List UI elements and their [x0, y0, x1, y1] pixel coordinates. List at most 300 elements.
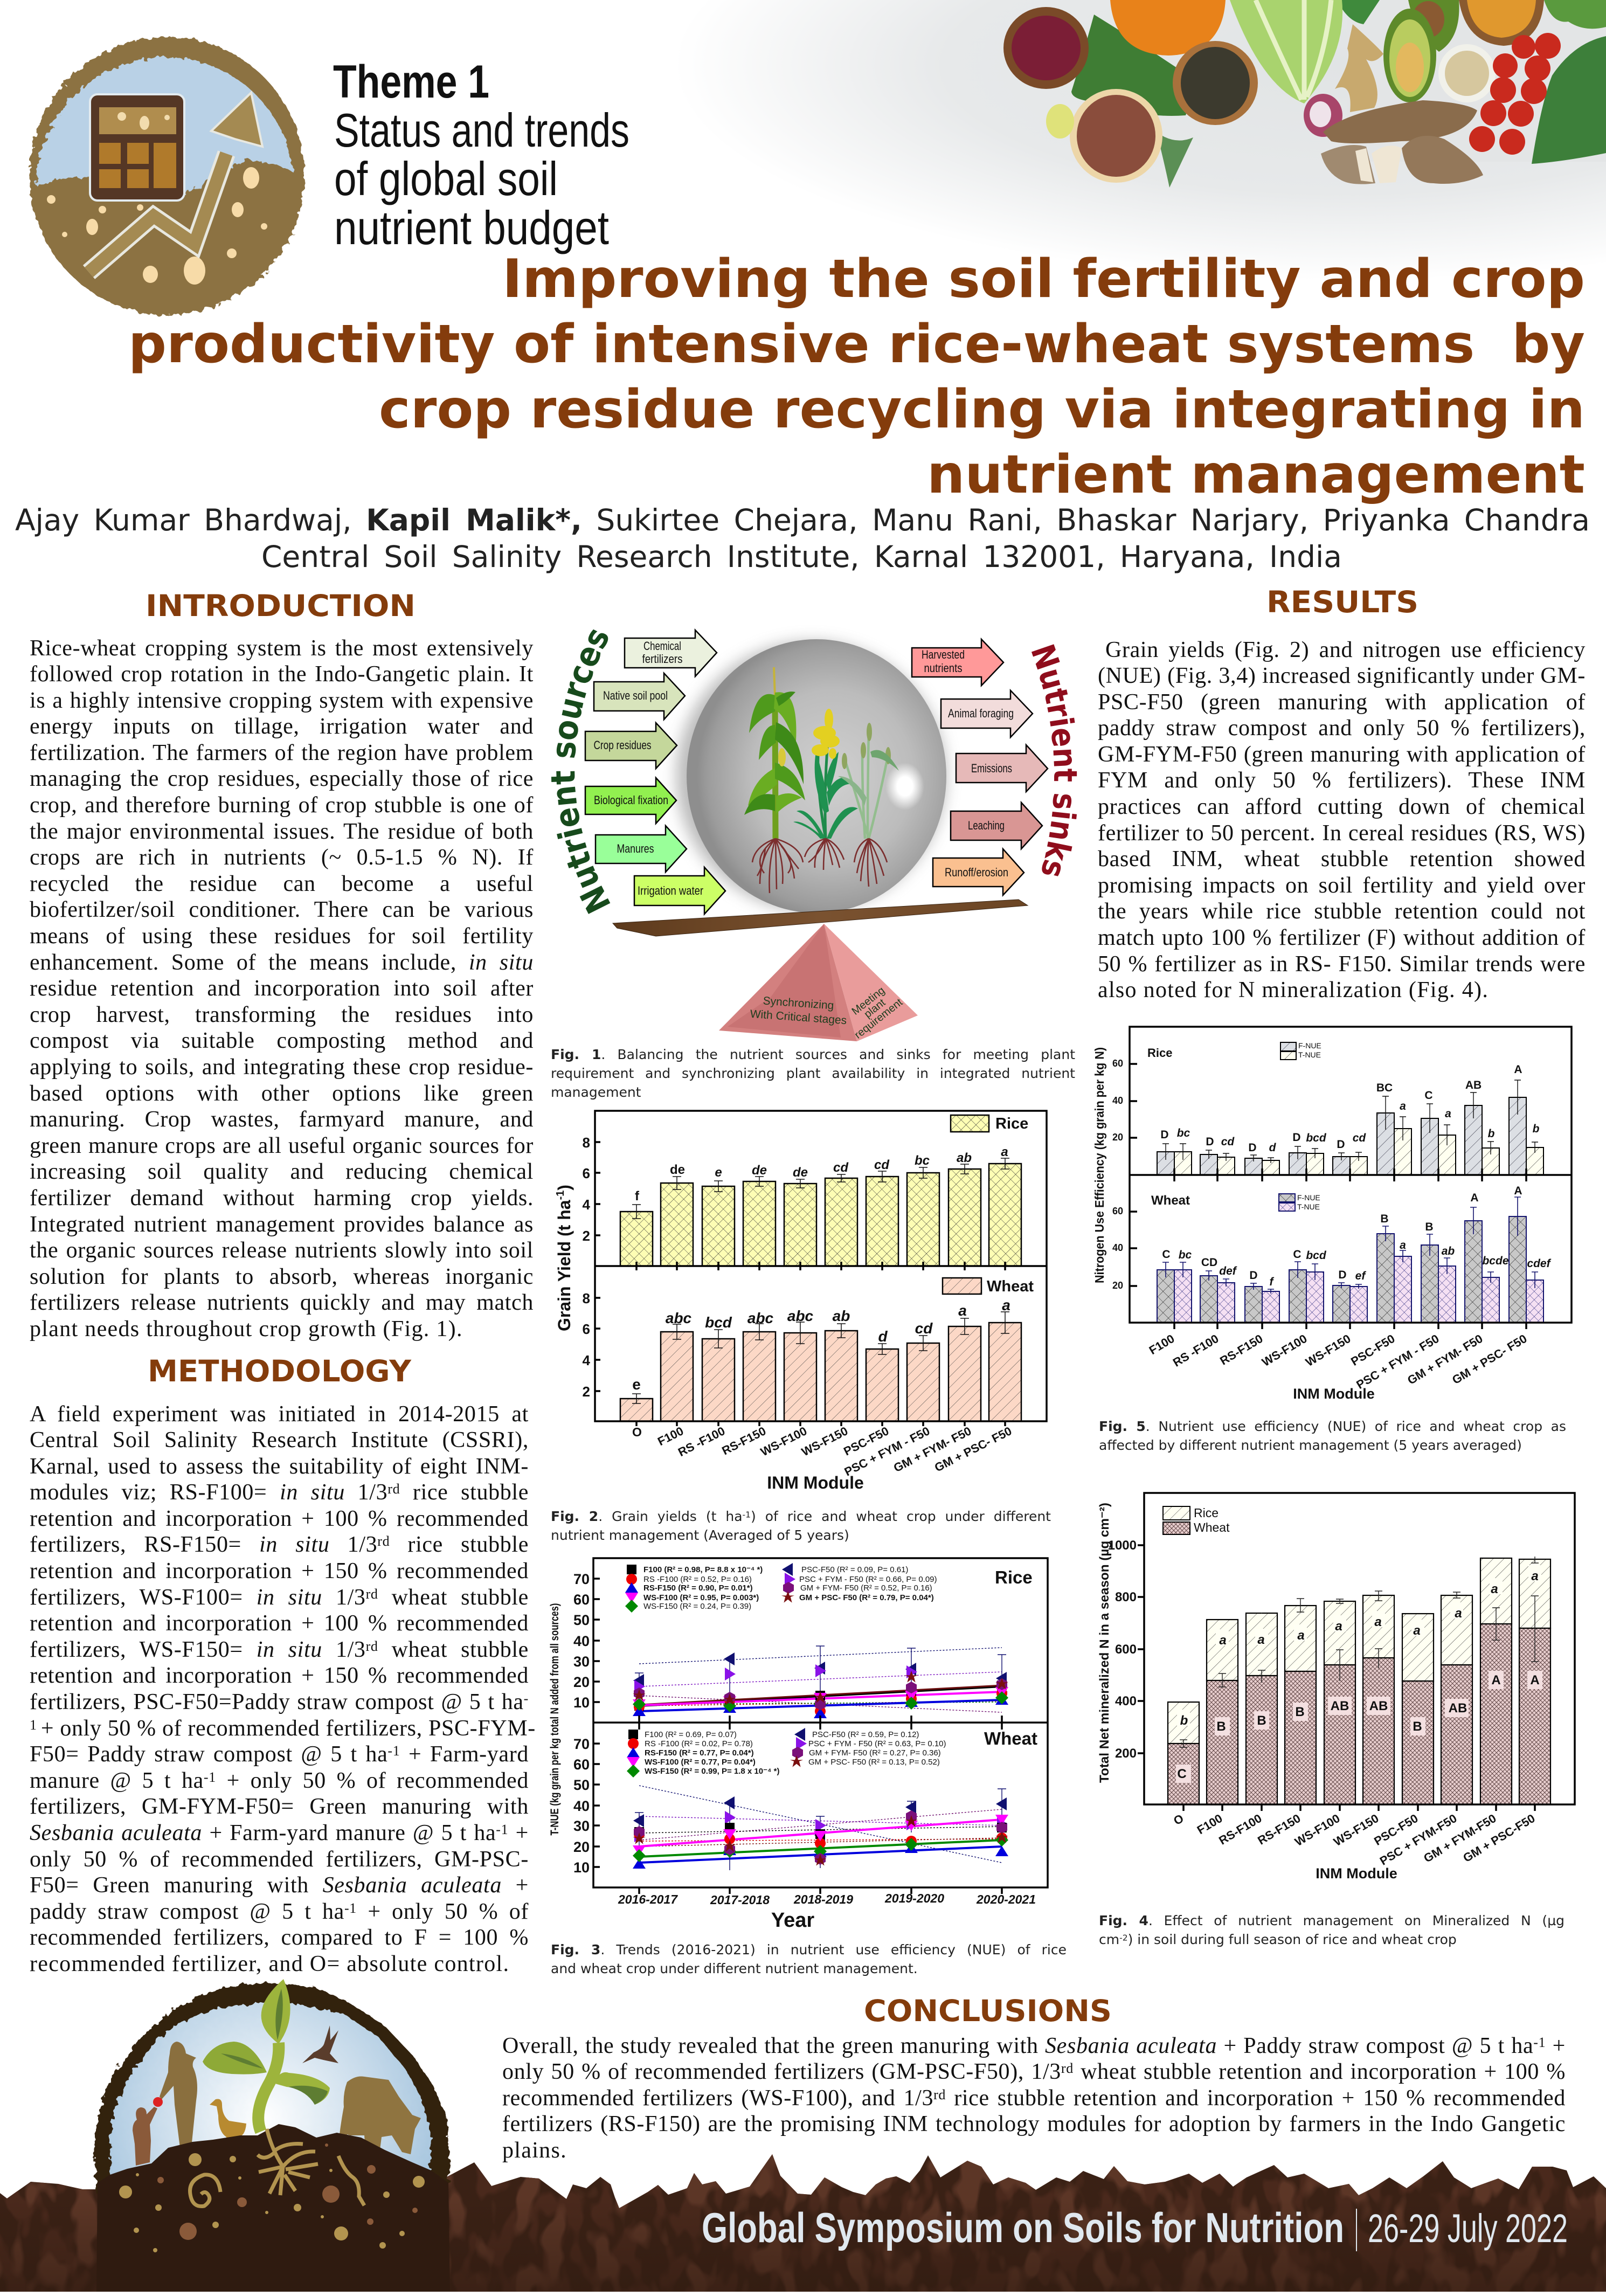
- rice T-NUE bars: [1174, 1129, 1543, 1175]
- legend: wheat: [943, 1278, 1034, 1295]
- text block: introduction: applying to soils, and integrating these crop residue-: [30, 1055, 534, 1080]
- significance letters: bc: [1179, 1249, 1192, 1261]
- significance letters: A: [1514, 1063, 1522, 1076]
- emblem calculator: [90, 94, 184, 200]
- arrow: chemical fertilizers: [625, 630, 717, 676]
- wheat markers: [633, 1796, 1008, 1869]
- significance letters: D: [1249, 1269, 1258, 1282]
- poster title: crop residue recycling via integrating in: [379, 379, 1585, 440]
- significance letters: a: [1335, 1619, 1342, 1634]
- text block: introduction: compost via suitable composting method and: [30, 1028, 534, 1053]
- significance letters: AB: [1331, 1699, 1349, 1713]
- y axis title: ): [555, 1185, 574, 1191]
- arrow: harvested nutrients: nutrients: [924, 661, 963, 675]
- significance letters: [1176, 1565, 1542, 1783]
- arrow: emissions: [956, 745, 1048, 792]
- caption: figure 2: nutrient management (Averaged of 5 years): [551, 1527, 849, 1543]
- caption: figure 4: [1099, 1911, 1565, 1949]
- illustration: living soil dome: [94, 1979, 450, 2292]
- x axis labels: GM + PSC-F50: [1460, 1811, 1538, 1865]
- text block: introduction: residue retention and incorporation into soil after: [30, 976, 534, 1001]
- significance letters: a: [1455, 1606, 1462, 1621]
- x axis labels: [618, 1891, 1036, 1907]
- text block: introduction: fertilizers release nutrients quickly and may match: [30, 1290, 534, 1315]
- y axis labels: 60: [573, 1592, 590, 1608]
- y axis labels: [1112, 1058, 1123, 1291]
- text block: introduction: crops are rich in nutrients (~ 0.5-1.5 % N). If: [30, 845, 534, 870]
- text block: introduction: crop, and therefore burning of crop stubble is one of: [30, 793, 534, 818]
- caption: figure 4: Fig. 4. Effect of nutrient management on Mineralized N (µg: [1099, 1913, 1565, 1928]
- significance letters: B: [1216, 1719, 1226, 1734]
- caption: figure 2: [551, 1509, 1051, 1543]
- arrow: biological fixation: [585, 778, 676, 824]
- heading: introduction: INTRODUCTION: [146, 589, 416, 623]
- caption: figure 5: affected by different nutrient management (5 years averaged): [1099, 1437, 1522, 1453]
- text block: introduction: fertilizer demand without harming crop yields.: [30, 1186, 534, 1211]
- significance letters: B: [1380, 1213, 1389, 1225]
- chart frame and ticks: [1130, 1027, 1572, 1329]
- arrow: native soil pool: Native soil pool: [603, 689, 668, 702]
- y axis labels: 200: [1115, 1746, 1137, 1761]
- wheat legend: [627, 1728, 946, 1778]
- food: leafy greens: [1071, 0, 1606, 188]
- food photograph backdrop: [674, 0, 1606, 280]
- y axis labels: 600: [1115, 1642, 1137, 1657]
- significance letters: cd: [1221, 1136, 1235, 1148]
- y axis labels: 70: [573, 1571, 590, 1587]
- y axis labels: 40: [573, 1798, 590, 1814]
- significance letters: a: [1374, 1615, 1382, 1629]
- text block: conclusions: fertilizers (RS-F150) are the promising INM technology modules for adoption by farmers in the Indo Gangetic: [502, 2112, 1566, 2136]
- text block: results: paddy straw compost and only 50 % fertilizers),: [1098, 716, 1586, 741]
- legend: rice: [951, 1115, 1028, 1132]
- heading: methodology: METHODOLOGY: [148, 1354, 412, 1388]
- y axis title: -1: [555, 1191, 566, 1200]
- significance letters: AB: [1449, 1701, 1467, 1716]
- rice trend lines: [639, 1648, 1002, 1712]
- significance letters: A: [1491, 1673, 1501, 1688]
- y axis labels: 1000: [1108, 1538, 1137, 1553]
- caption: figure 1: Fig. 1. Balancing the nutrient sources and sinks for meeting plant: [551, 1047, 1075, 1062]
- text block: methodology: fertilizers, WS-F100= in situ 1/3rd wheat stubble: [30, 1585, 529, 1610]
- silhouette: cow: [338, 2076, 421, 2154]
- significance letters: d: [878, 1328, 888, 1345]
- caption: figure 3: Fig. 3. Trends (2016-2021) in nutrient use efficiency (NUE) of rice: [551, 1942, 1067, 1958]
- y axis labels: [1108, 1538, 1137, 1761]
- caption: figure 1: requirement and synchronizing plant availability in integrated nutrient: [551, 1066, 1075, 1081]
- y axis labels: 20: [1112, 1132, 1123, 1143]
- text block: results: PSC-F50 (green manuring with application of: [1098, 690, 1586, 715]
- plant roots: [752, 839, 887, 893]
- significance letters: C: [1293, 1248, 1302, 1261]
- wheat error bars: [1162, 1197, 1538, 1294]
- roots: [258, 2129, 318, 2195]
- figure 1: nutrient balance diagram: [551, 628, 1077, 1041]
- text block: introduction: the organic sources release nutrients slowly into soil: [30, 1238, 534, 1263]
- text block: results: (NUE) (Fig. 3,4) increased significantly under GM-: [1098, 663, 1586, 688]
- text block: methodology: Central Soil Salinity Research Institute (CSSRI),: [30, 1428, 529, 1453]
- legend: rice: Rice: [995, 1115, 1028, 1132]
- text block: results: the years while rice stubble retention could not: [1098, 899, 1586, 924]
- text block: results: fertilizer to 50 percent. In cereal residues (RS, WS): [1098, 821, 1586, 846]
- arrow: irrigation water: Irrigation water: [638, 884, 703, 897]
- food: broccoli: [1544, 0, 1606, 29]
- rice markers: [633, 1652, 1008, 1718]
- y axis labels: 40: [1112, 1095, 1123, 1106]
- wheat panel label and legend: F-NUE: [1297, 1193, 1320, 1202]
- rice legend: [625, 1563, 937, 1613]
- emblem soil dots: [47, 167, 267, 285]
- rice panel label and legend: F-NUE: [1298, 1041, 1321, 1050]
- food: red beans bowl: [1003, 7, 1089, 89]
- poster title: nutrient management: [927, 444, 1585, 506]
- y axis title: Total Net mineralized N in a season (µg cm⁻²): [1097, 1503, 1112, 1783]
- pyramid fulcrum: [719, 924, 918, 1041]
- dome rim: [94, 1983, 450, 2194]
- text block: introduction: is a highly intensive cropping system with expensive: [30, 688, 534, 713]
- x axis labels: GM + FYM- F50: [891, 1424, 973, 1475]
- y axis labels: 20: [573, 1839, 590, 1855]
- significance letters: a: [1257, 1633, 1265, 1647]
- affiliation line: Central Soil Salinity Research Institute, Karnal 132001, Haryana, India: [261, 540, 1342, 574]
- x axis labels: RS-F150: [1217, 1332, 1265, 1368]
- food: tomatoes: [1469, 33, 1561, 155]
- wheat legend: WS-F150 (R² = 0.99, P= 1.8 x 10⁻⁴ *): [645, 1767, 779, 1776]
- significance letters: [1160, 1063, 1552, 1288]
- rice legend: PSC-F50 (R² = 0.09, P= 0.61): [801, 1565, 908, 1574]
- text block: introduction: [30, 636, 534, 1341]
- text block: methodology: paddy straw compost @ 5 t ha-1 + only 50 % of: [30, 1899, 529, 1924]
- significance letters: B: [1425, 1221, 1434, 1233]
- text block: methodology: F50= Paddy straw compost @ 5 t ha-1 + Farm-yard: [30, 1742, 529, 1767]
- theme heading: [333, 56, 629, 254]
- significance letters: bc: [1177, 1127, 1190, 1139]
- text block: introduction: means of using these residues for soil fertility: [30, 924, 534, 949]
- text block: methodology: fertilizers, GM-FYM-F50= Green manuring with: [30, 1794, 529, 1819]
- significance letters: A: [1530, 1673, 1540, 1688]
- significance letters: BC: [1376, 1082, 1393, 1094]
- wheat error bars: [635, 1789, 1006, 1870]
- wheat panel label and legend: [1151, 1193, 1320, 1211]
- arrow: harvested nutrients: [912, 639, 1003, 686]
- legend: wheat: Wheat: [987, 1278, 1034, 1295]
- poster title: productivity of intensive rice-wheat systems by: [128, 314, 1585, 375]
- y axis labels: 4: [583, 1197, 591, 1213]
- wheat legend: RS-F150 (R² = 0.77, P= 0.04*): [645, 1748, 754, 1758]
- text block: introduction: the major environmental issues. The residue of both: [30, 819, 534, 844]
- x axis labels: RS-F150: [719, 1424, 768, 1457]
- emblem sky: [36, 57, 294, 195]
- significance letters: D: [1292, 1131, 1301, 1144]
- text block: results: based INM, wheat stubble retention showed: [1098, 847, 1586, 872]
- significance letters: [632, 1145, 1010, 1393]
- caption: figure 5: Fig. 5. Nutrient use efficiency (NUE) of rice and wheat crop as: [1099, 1419, 1566, 1434]
- significance letters: D: [1160, 1129, 1169, 1141]
- divider: [1356, 2209, 1357, 2251]
- food: lentil bowl: [1459, 0, 1544, 46]
- spiral: [190, 2175, 220, 2207]
- rice legend: PSC + FYM - F50 (R² = 0.66, P= 0.09): [799, 1575, 937, 1584]
- significance letters: a: [1297, 1628, 1305, 1643]
- text block: introduction: biofertilzer/soil conditioner. There can be various: [30, 897, 534, 922]
- text block: results: 50 % fertilizer as in RS- F150. Similar trends were: [1098, 952, 1586, 977]
- soil nodules: [119, 2153, 425, 2252]
- significance letters: abc: [666, 1310, 692, 1326]
- y axis labels: 20: [573, 1674, 590, 1690]
- text block: introduction: plant needs throughout crop growth (Fig. 1).: [30, 1317, 463, 1341]
- sphere shadow: [676, 641, 946, 911]
- y axis labels: 800: [1115, 1590, 1137, 1605]
- wheat trend lines: [639, 1786, 1002, 1863]
- text block: methodology: retention and incorporation + 100 % recommended: [30, 1611, 529, 1636]
- poster title: Improving the soil fertility and crop: [502, 248, 1585, 310]
- significance letters: ab: [833, 1308, 850, 1324]
- figure 5: nitrogen use efficiency bars: [1092, 1027, 1572, 1402]
- rice panel label and legend: Rice: [1147, 1046, 1172, 1060]
- theme heading: of global soil: [334, 152, 558, 205]
- food: grain bowl: [1438, 44, 1496, 102]
- wheat legend: GM + PSC- F50 (R² = 0.13, P= 0.52): [808, 1758, 940, 1767]
- rice legend: WS-F100 (R² = 0.95, P= 0.003*): [643, 1593, 759, 1602]
- food: ginger: [1335, 24, 1383, 112]
- rice panel label and legend: [1147, 1041, 1321, 1060]
- arrow: emissions: Emissions: [971, 762, 1012, 775]
- x axis labels: PSC + FYM-F50: [1377, 1811, 1459, 1868]
- text block: methodology: Karnal, used to assess the suitability of eight INM-: [30, 1454, 529, 1479]
- text block: methodology: Sesbania aculeata + Farm-yard manure @ 5 t ha-1 +: [30, 1821, 529, 1845]
- text block: methodology: recommended fertilizers, compared to F = 100 %: [30, 1925, 529, 1950]
- x axis labels: WS-F100: [1292, 1811, 1342, 1849]
- pyramid fulcrum: With Critical stages: [750, 1008, 847, 1027]
- y axis labels: 70: [573, 1736, 590, 1752]
- arrow: runoff/erosion: Runoff/erosion: [945, 866, 1008, 879]
- text block: introduction: energy inputs on tillage, irrigation water and: [30, 714, 534, 739]
- pyramid fulcrum: Synchronizing: [763, 994, 834, 1012]
- significance letters: b: [1488, 1128, 1495, 1140]
- significance letters: f: [1270, 1276, 1274, 1288]
- significance letters: AB: [1465, 1079, 1482, 1091]
- arrow: leaching: [951, 803, 1042, 849]
- wheat panel label and legend: Wheat: [1151, 1193, 1190, 1208]
- significance letters: bcd: [1306, 1249, 1327, 1262]
- text block: introduction: solution for plants to absorb, whereas inorganic: [30, 1264, 534, 1289]
- x axis labels: [632, 1424, 1014, 1479]
- significance letters: C: [1162, 1248, 1171, 1261]
- pyramid fulcrum: requirement: [852, 996, 905, 1041]
- significance letters: D: [1248, 1142, 1257, 1154]
- arrow: chemical fertilizers: fertilizers: [642, 652, 682, 666]
- caption: figure 1: [551, 1047, 1075, 1100]
- rice error bars: [1162, 1080, 1538, 1163]
- significance letters: a: [958, 1302, 967, 1319]
- theme heading: Status and trends: [334, 103, 629, 157]
- symposium name: Global Symposium on Soils for Nutrition: [702, 2204, 1344, 2251]
- rice legend: RS -F100 (R² = 0.52, P= 0.16): [643, 1575, 752, 1584]
- significance letters: a: [1413, 1623, 1421, 1638]
- wheat legend: GM + FYM- F50 (R² = 0.27, P= 0.36): [809, 1748, 941, 1758]
- text block: conclusions: recommended fertilizers (WS-F100), and 1/3rd rice stubble retention and incorporation + 150 % recommended: [502, 2086, 1566, 2111]
- significance letters: bcd: [705, 1314, 732, 1331]
- text block: introduction: crop harvest, transforming the residues into: [30, 1002, 534, 1027]
- y axis labels: 4: [583, 1352, 591, 1368]
- significance letters: de: [752, 1163, 767, 1178]
- significance letters: bc: [915, 1153, 930, 1168]
- y axis labels: 2: [583, 1228, 590, 1244]
- text block: results: also noted for N mineralization (Fig. 4).: [1098, 978, 1489, 1002]
- arrow: irrigation water: [634, 867, 725, 914]
- chart frame and ticks: [595, 1111, 1047, 1426]
- plant: wheat: [838, 723, 899, 839]
- plant: rice: [793, 709, 858, 839]
- arrow: biological fixation: Biological fixation: [594, 793, 668, 807]
- significance letters: abc: [747, 1310, 774, 1326]
- y axis labels: 10: [573, 1695, 590, 1711]
- pyramid fulcrum: plant: [862, 997, 888, 1020]
- text block: conclusions: only 50 % of recommended fertilizers (GM-PSC-F50), 1/3rd wheat stubble retention and incorporation + 100 %: [502, 2059, 1566, 2084]
- significance letters: a: [1445, 1108, 1451, 1120]
- food: quinoa bowl: [1070, 89, 1162, 183]
- heading: conclusions: CONCLUSIONS: [864, 1994, 1112, 2028]
- plant: maize: [744, 667, 805, 839]
- rice error bars: [635, 1646, 1006, 1711]
- rice legend: GM + PSC- F50 (R² = 0.79, P= 0.04*): [799, 1593, 934, 1602]
- text block: results: FYM and only 50 % fertilizers). These INM: [1098, 768, 1586, 793]
- significance letters: D: [1337, 1138, 1345, 1151]
- rice legend: WS-F150 (R² = 0.24, P= 0.39): [643, 1602, 751, 1611]
- text block: results: practices can afford cutting down of chemical: [1098, 794, 1586, 819]
- text block: methodology: retention and incorporation + 150 % recommended: [30, 1663, 529, 1688]
- wheat F-NUE bars: [1157, 1216, 1526, 1323]
- y axis title: Nitrogen Use Efficiency (kg grain per kg N): [1092, 1047, 1106, 1283]
- y axis labels: 8: [583, 1290, 590, 1306]
- significance letters: a: [1001, 1145, 1008, 1159]
- y axis labels: 40: [1112, 1242, 1123, 1253]
- figure 2: grain yield bar chart: [555, 1111, 1047, 1492]
- significance letters: d: [1269, 1142, 1277, 1154]
- x axis labels: PSC-F50: [841, 1424, 891, 1458]
- y axis labels: [573, 1571, 590, 1876]
- text block: results: Grain yields (Fig. 2) and nitrogen use efficiency: [1105, 637, 1586, 662]
- wheat legend: WS-F100 (R² = 0.77, P= 0.04*): [645, 1758, 756, 1767]
- y axis title: T-NUE (kg grain per kg total N added from all sources): [549, 1603, 561, 1836]
- significance letters: ab: [957, 1151, 972, 1165]
- emblem rising arrow: [89, 93, 262, 272]
- x axis labels: RS -F100: [1171, 1332, 1221, 1370]
- x axis labels: 2016-2017: [618, 1892, 678, 1906]
- text block: conclusions: Overall, the study revealed that the green manuring with Sesbania aculeata + Paddy straw compost @ 5 t ha-1 +: [502, 2033, 1566, 2058]
- x axis labels: WS-F150: [1303, 1332, 1353, 1369]
- text block: introduction: enhancement. Some of the means include, in situ: [30, 950, 534, 975]
- text block: introduction: recycled the residue can become a useful: [30, 872, 534, 896]
- text block: results: promising impacts on soil fertility and yield over: [1098, 873, 1586, 898]
- x axis title: INM Module: [767, 1473, 864, 1492]
- wheat legend: RS -F100 (R² = 0.02, P= 0.78): [645, 1739, 753, 1748]
- x axis labels: F100: [1147, 1332, 1177, 1357]
- rice panel label and legend: T-NUE: [1298, 1050, 1321, 1059]
- chart frame and ticks: [593, 1558, 1048, 1894]
- wheat legend: PSC-F50 (R² = 0.59, P= 0.12): [812, 1730, 919, 1739]
- x axis labels: PSC + FYM - F50: [842, 1424, 932, 1479]
- x axis labels: RS -F100: [676, 1424, 727, 1459]
- rice legend: RS-F150 (R² = 0.90, P= 0.01*): [643, 1583, 753, 1593]
- significance letters: b: [1180, 1713, 1188, 1728]
- silhouette: bird: [302, 2025, 338, 2063]
- y axis labels: 30: [573, 1654, 590, 1670]
- caption: figure 3: and wheat crop under different nutrient management.: [551, 1961, 918, 1976]
- significance letters: cd: [915, 1320, 933, 1337]
- x axis labels: O: [1171, 1811, 1186, 1828]
- significance letters: a: [1491, 1582, 1498, 1596]
- significance letters: a: [1002, 1297, 1010, 1313]
- x axis title: Year: [771, 1909, 814, 1932]
- food: avocado halves: [1383, 0, 1459, 102]
- text block: results: match upto 100 % fertilizer (F) without addition of: [1098, 925, 1586, 950]
- text block: methodology: manure @ 5 t ha-1 + only 50 % of recommended: [30, 1768, 529, 1793]
- food: black rice bowl: [1173, 41, 1258, 125]
- panel label: wheat: Wheat: [984, 1728, 1037, 1748]
- text block: methodology: 1 + only 50 % of recommended fertilizers, PSC-FYM-: [30, 1716, 536, 1741]
- arrow: runoff/erosion: [933, 849, 1024, 895]
- caption: figure 5: [1099, 1419, 1566, 1453]
- heading: results: RESULTS: [1266, 585, 1418, 619]
- rice stack: [1168, 1558, 1550, 1744]
- text block: methodology: F50= Green manuring with Sesbania aculeata +: [30, 1873, 529, 1898]
- rice legend: GM + FYM- F50 (R² = 0.52, P= 0.16): [800, 1583, 932, 1593]
- x axis labels: GM + FYM- F50: [1405, 1332, 1485, 1387]
- chart frame and ticks: [1138, 1493, 1575, 1811]
- significance letters: D: [1338, 1269, 1347, 1281]
- emblem soil disc: [30, 37, 304, 315]
- legend: Rice: [1194, 1506, 1219, 1520]
- text block: introduction: Rice-wheat cropping system is the most extensively: [30, 636, 534, 661]
- text block: introduction: managing the crop residues, especially those of rice: [30, 766, 534, 791]
- significance letters: A: [1470, 1192, 1479, 1204]
- soil mottling: [0, 2150, 1606, 2292]
- y axis title: Grain Yield (t ha: [555, 1200, 574, 1331]
- worm: [338, 2156, 364, 2205]
- x axis labels: RS-F100: [1216, 1811, 1264, 1848]
- text block: introduction: manuring. Crop wastes, farmyard manure, and: [30, 1107, 534, 1132]
- x axis labels: 2019-2020: [884, 1891, 944, 1905]
- panel label: rice: Rice: [995, 1567, 1033, 1587]
- significance letters: CD: [1201, 1256, 1217, 1269]
- arrow: crop residues: [585, 723, 677, 769]
- silhouette: woman: [160, 2042, 197, 2148]
- legend: [1163, 1506, 1230, 1534]
- figure 4: mineralized nitrogen stacked bars: [1097, 1493, 1575, 1882]
- text block: methodology: A field experiment was initiated in 2014-2015 at: [30, 1401, 529, 1426]
- seedling: [203, 1979, 330, 2132]
- x axis labels: WS-F150: [1331, 1811, 1381, 1849]
- text block: conclusions: [502, 2033, 1566, 2163]
- caption: figure 3: [551, 1942, 1067, 1976]
- significance letters: C: [1424, 1089, 1433, 1102]
- significance letters: B: [1413, 1719, 1422, 1734]
- wheat bars: [620, 1323, 1021, 1421]
- arrow: native soil pool: [594, 673, 685, 720]
- wheat legend: F100 (R² = 0.69, P= 0.07): [645, 1730, 737, 1739]
- x axis title: INM Module: [1293, 1386, 1375, 1402]
- text block: results: [1098, 637, 1586, 1002]
- x axis labels: WS-F100: [758, 1424, 809, 1459]
- arrow: animal foraging: Animal foraging: [948, 707, 1014, 720]
- y axis labels: 400: [1115, 1694, 1137, 1709]
- significance letters: abc: [787, 1308, 814, 1324]
- y axis labels: [583, 1135, 591, 1400]
- figure 3: nutrient use efficiency trends: [549, 1558, 1048, 1932]
- text block: methodology: fertilizers, RS-F150= in situ 1/3rd rice stubble: [30, 1532, 529, 1557]
- significance letters: b: [1533, 1123, 1540, 1135]
